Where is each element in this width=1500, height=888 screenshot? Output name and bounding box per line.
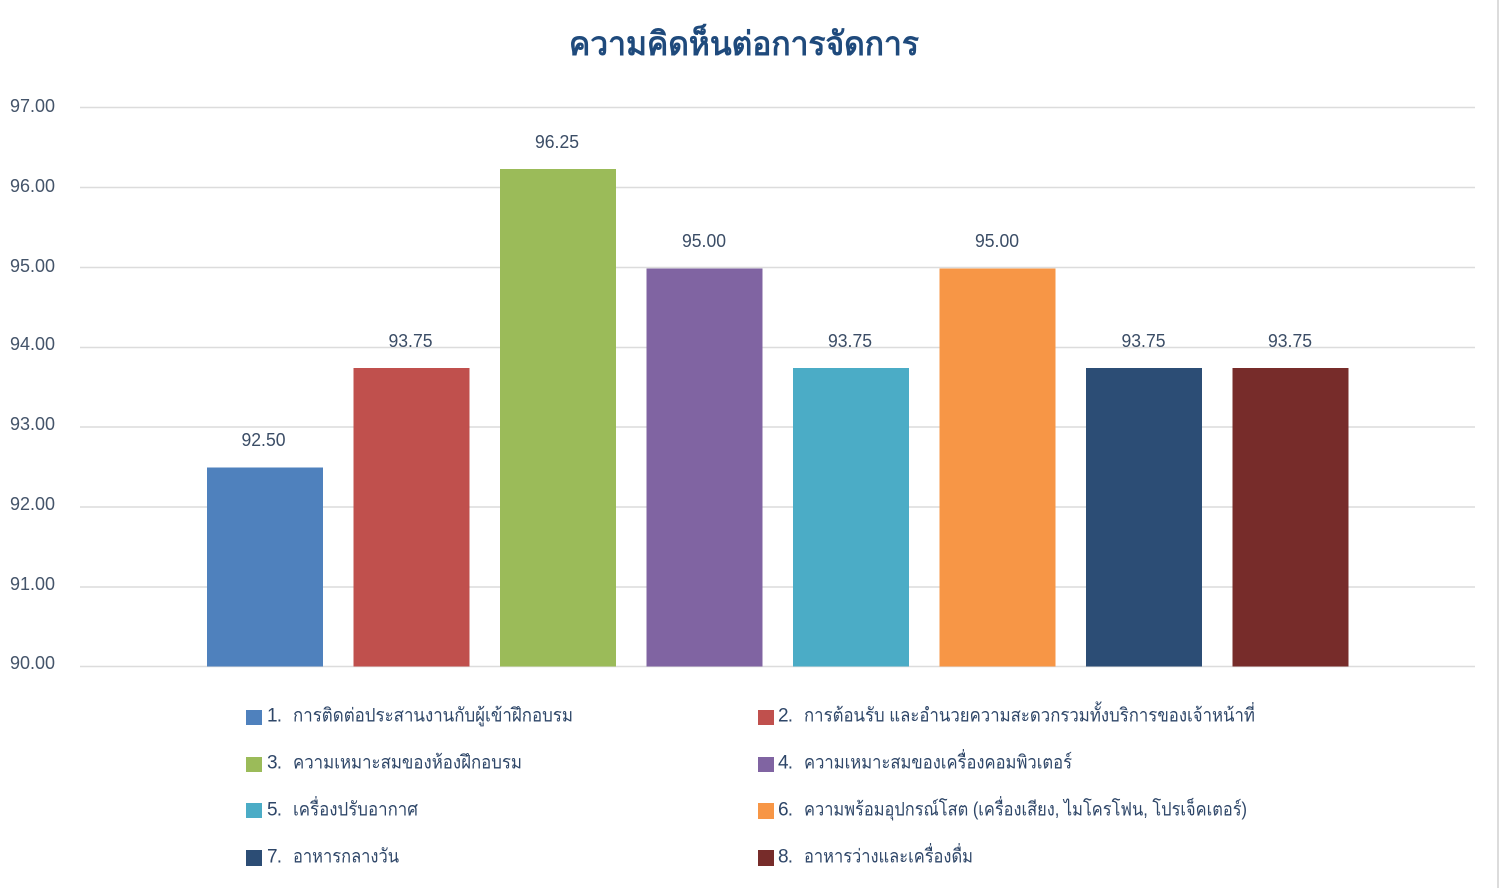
bar 2: 93.75 (354, 368, 470, 666)
y axis labels: 94.00 (10, 334, 55, 354)
legend item 2: 2. (778, 706, 793, 726)
value labels: 96.25 (535, 132, 579, 152)
y axis labels (10, 96, 55, 673)
legend item 1: 1. (267, 706, 282, 726)
value labels: 93.75 (1268, 331, 1312, 351)
value labels: 92.50 (242, 430, 286, 450)
y axis labels: 97.00 (10, 96, 55, 116)
legend item 7 (246, 846, 399, 868)
legend item 4: ความเหมาะสมของเครื่องคอมพิวเตอร์ (804, 748, 1072, 774)
bar chart (207, 169, 1348, 666)
legend item 4 (758, 748, 1072, 774)
y axis labels: 90.00 (10, 653, 55, 673)
title: ความคิดห็นต่อการจัดการ (569, 23, 919, 62)
legend item 5: 5. (267, 800, 282, 820)
value labels: 95.00 (975, 231, 1019, 251)
legend item 4: 4. (778, 752, 793, 774)
bar 6: 95.00 (940, 268, 1056, 666)
value labels: 93.75 (1122, 331, 1166, 351)
legend item 5: เครื่องปรับอากาศ (293, 796, 418, 820)
y axis labels: 92.00 (10, 494, 55, 514)
legend item 1: การติดต่อประสานงานกับผู้เข้าฝึกอบรม (293, 706, 573, 726)
bar 8: 93.75 (1232, 368, 1348, 666)
y axis labels: 91.00 (10, 574, 55, 594)
legend item 2 (758, 702, 1255, 726)
bar 5: 93.75 (793, 368, 909, 666)
legend item 6 (758, 796, 1247, 822)
legend item 8: อาหารว่างและเครื่องดื่ม (804, 842, 973, 868)
value labels: 95.00 (682, 231, 726, 251)
legend item 3: 3. (267, 752, 282, 774)
y axis labels: 96.00 (10, 176, 55, 196)
value labels (242, 132, 1312, 450)
bar 1: 92.50 (207, 468, 323, 666)
bar 4: 95.00 (646, 268, 762, 666)
value labels: 93.75 (828, 331, 872, 351)
legend item 2: การต้อนรับ และอำนวยความสะดวกรวมทั้งบริการของเจ้าหน้าที่ (804, 702, 1255, 726)
value labels: 93.75 (388, 331, 432, 351)
y axis labels: 93.00 (10, 414, 55, 434)
legend (246, 702, 1255, 868)
legend item 7: อาหารกลางวัน (293, 846, 399, 868)
legend item 7: 7. (267, 846, 282, 868)
legend item 8 (758, 842, 973, 868)
legend item 6: 6. (778, 800, 793, 820)
bar 7: 93.75 (1086, 368, 1202, 666)
bar 3: 96.25 (500, 169, 616, 666)
y axis labels: 95.00 (10, 256, 55, 276)
legend item 8: 8. (778, 846, 793, 868)
legend item 5 (246, 796, 418, 820)
legend item 6: ความพร้อมอุปกรณ์โสต (เครื่องเสียง, ไมโครโฟน, โปรเจ็คเตอร์) (804, 796, 1247, 822)
legend item 3: ความเหมาะสมของห้องฝึกอบรม (293, 752, 522, 774)
